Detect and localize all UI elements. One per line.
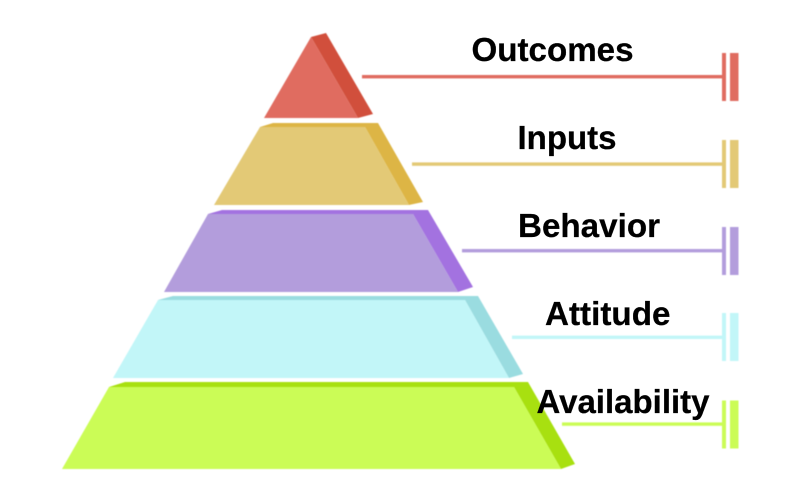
label: Inputs: Inputs [518,119,616,156]
label: Availability: Availability [536,383,710,420]
label: Behavior: Behavior [518,207,660,244]
label: Outcomes: Outcomes [472,31,634,68]
tier: Outcomes (red) [264,33,373,118]
tier: Inputs (yellow) [214,123,423,205]
tier: Availability (green) [62,382,575,469]
tier: Behavior (purple) [164,210,473,292]
connector: Outcomes [362,53,738,101]
connector: Inputs [412,140,738,188]
label: Attitude: Attitude [545,295,670,332]
connector: Attitude [512,313,738,361]
connector: Availability [562,400,738,448]
tier: Attitude (cyan) [113,296,523,378]
connector: Behavior [462,227,738,275]
